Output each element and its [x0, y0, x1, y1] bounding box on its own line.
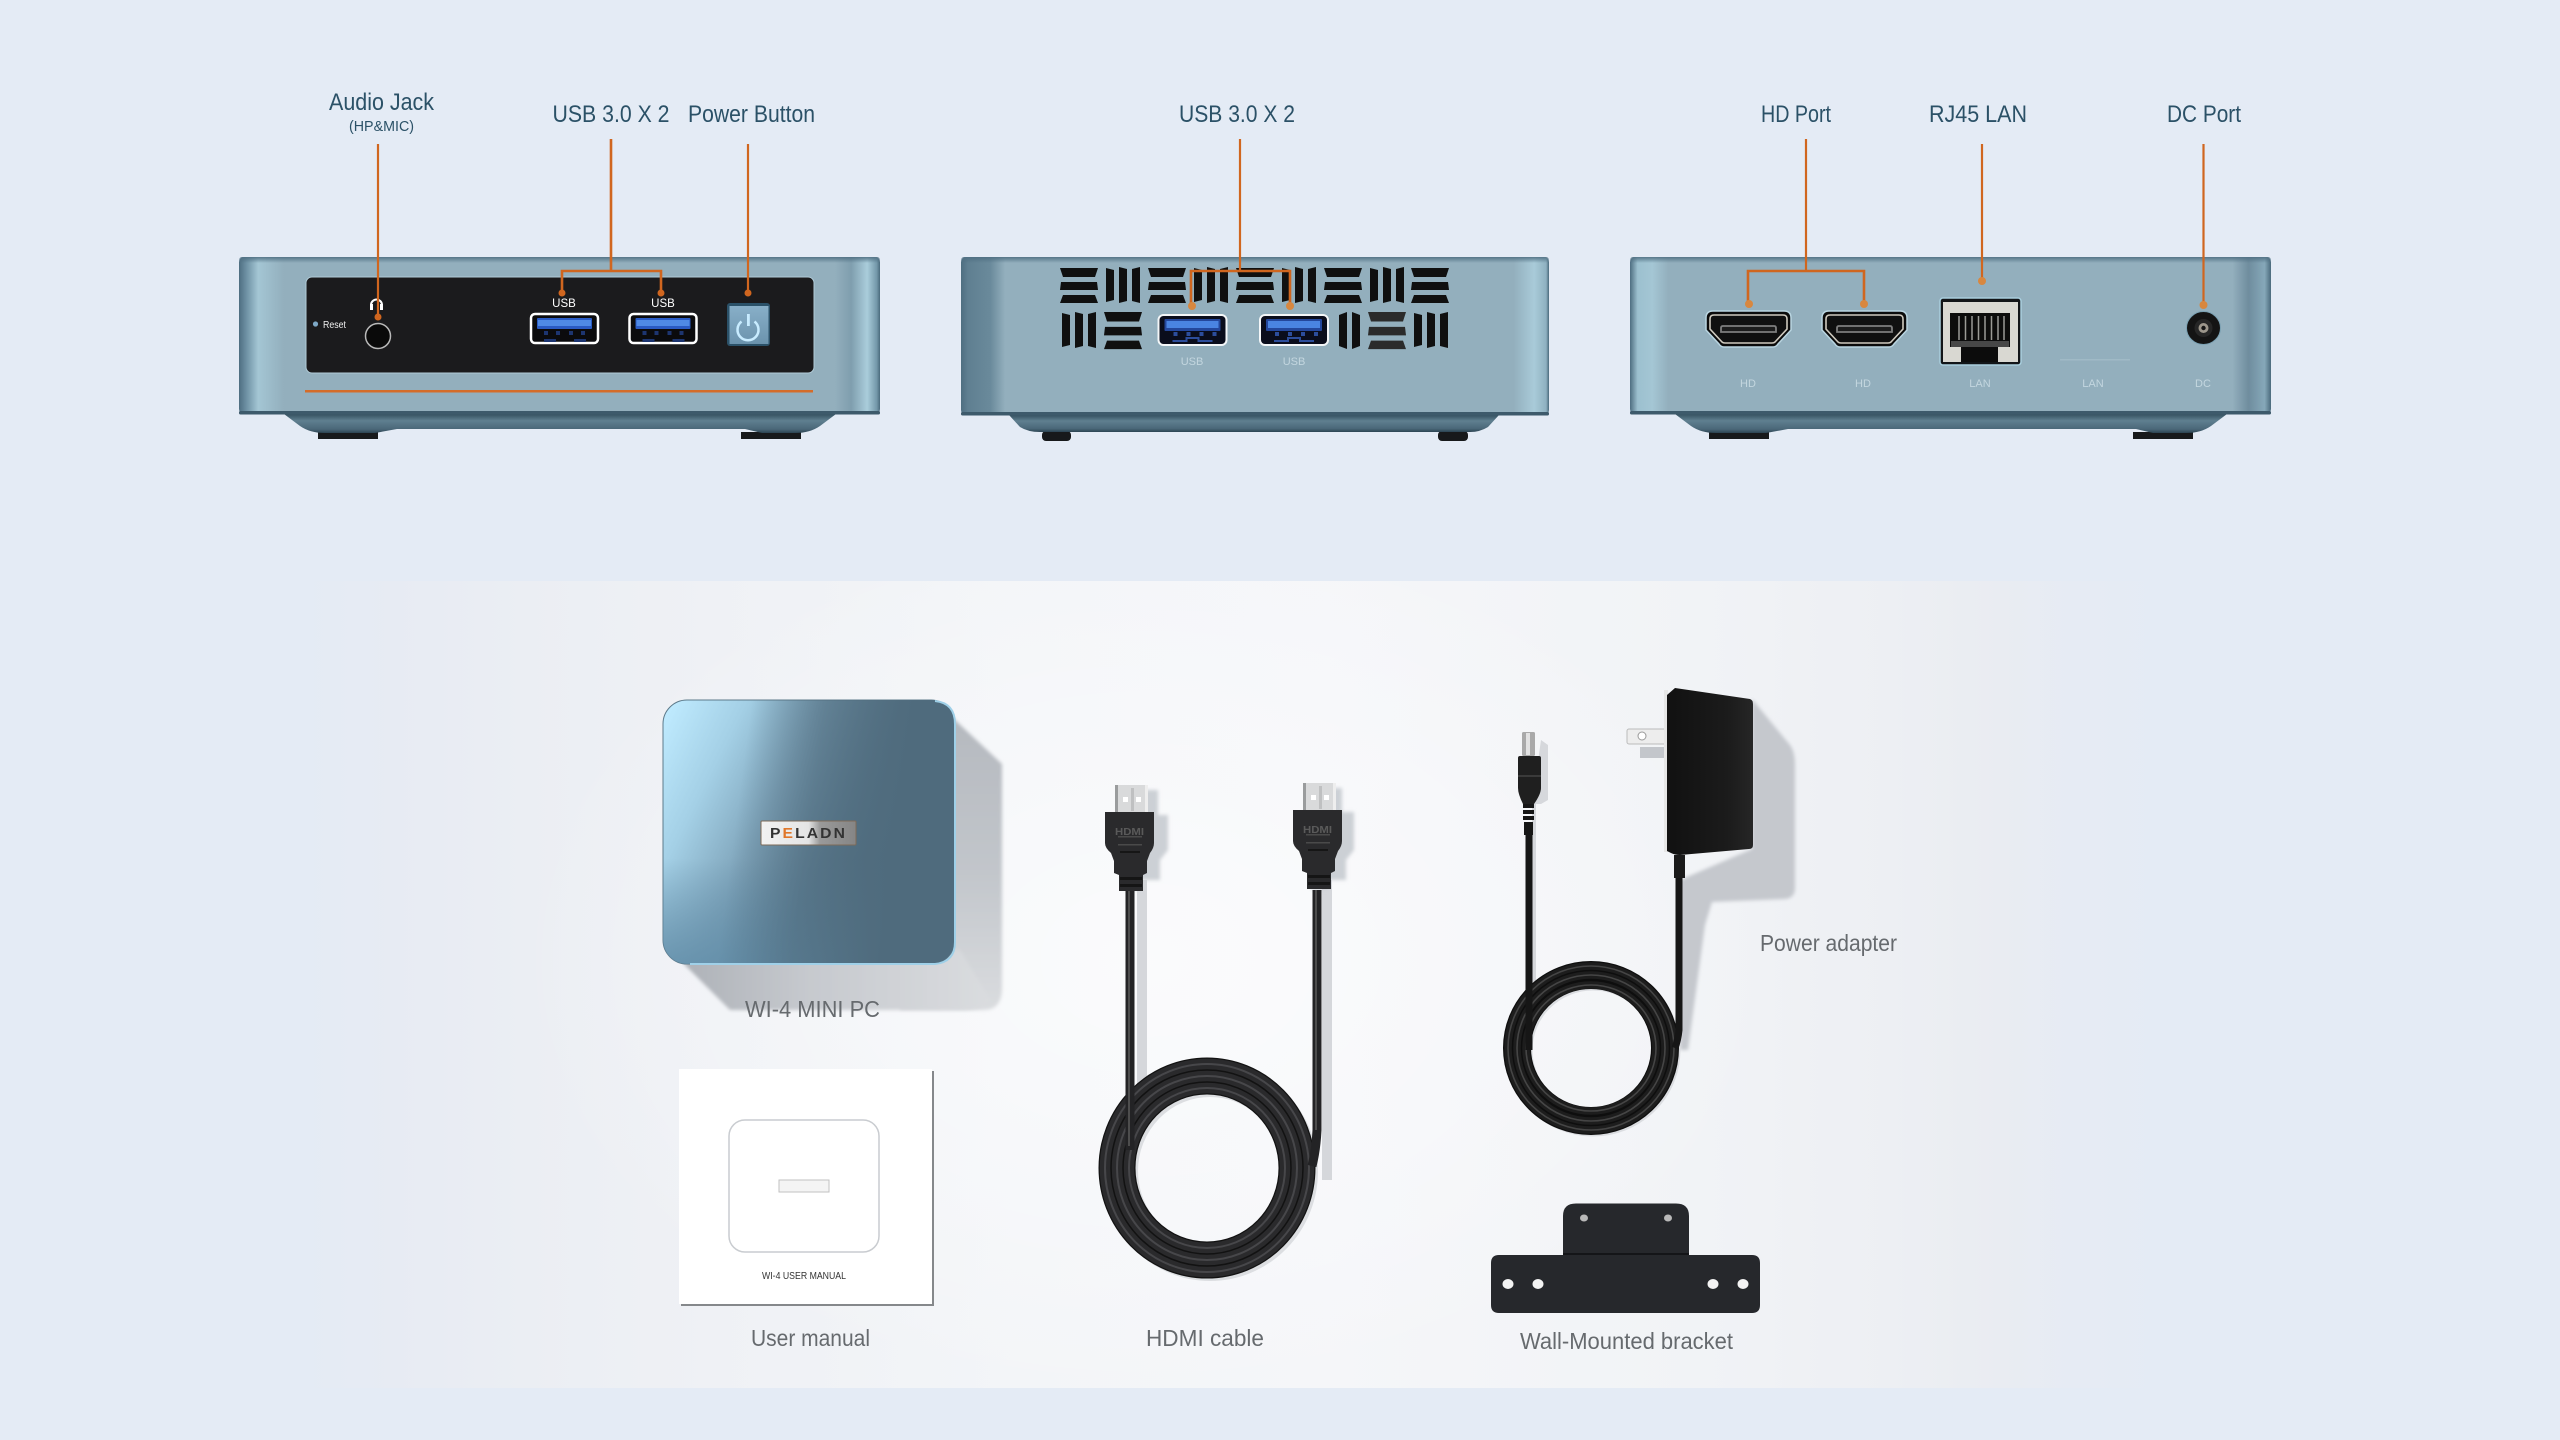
label: Audio Jack: Audio Jack	[329, 89, 435, 116]
black port panel	[306, 277, 814, 373]
rear USB port left	[1158, 315, 1226, 345]
port captions: HD	[1855, 378, 1871, 390]
reset pinhole and text: Reset	[323, 319, 346, 331]
label: RJ45 LAN: RJ45 LAN	[1929, 101, 2027, 128]
blanked LAN mark	[2060, 359, 2130, 360]
manual title: WI-4 USER MANUAL	[762, 1270, 846, 1282]
USB labels: USB	[552, 298, 576, 310]
panel: package contents backdrop	[300, 581, 2170, 1388]
prong	[1627, 729, 1667, 744]
item: mini PC top view	[663, 700, 1002, 1010]
label: HD Port: HD Port	[1761, 101, 1831, 128]
item: HDMI cable	[1105, 783, 1354, 1272]
left connector	[1105, 785, 1154, 891]
cast shadow right	[900, 706, 1002, 1010]
cable runs	[1129, 890, 1317, 1166]
body	[961, 257, 1549, 415]
left connector: HDMI	[1115, 827, 1144, 838]
label: HDMI cable: HDMI cable	[1146, 1325, 1264, 1351]
port captions	[1740, 378, 2211, 390]
PELADN badge	[761, 821, 856, 845]
power button	[727, 303, 770, 346]
device lid	[663, 700, 955, 964]
label: HP and MIC: (HP&MIC)	[349, 118, 414, 135]
panel: back ports device	[1630, 257, 2271, 439]
feet	[318, 432, 801, 439]
reset pinhole and text	[313, 319, 346, 331]
label: User manual: User manual	[751, 1325, 870, 1351]
label: WI-4 MINI PC: WI-4 MINI PC	[745, 996, 880, 1022]
vents bottom row	[1062, 312, 1448, 349]
callout lines: front view	[374, 139, 752, 320]
panel: front view device	[239, 257, 880, 439]
vents top row	[1060, 267, 1449, 303]
adapter body	[1667, 688, 1753, 855]
USB labels	[552, 298, 675, 310]
item: user manual	[679, 1069, 934, 1306]
item: wall-mounted bracket	[1491, 1204, 1760, 1313]
right connector: HDMI	[1303, 825, 1332, 836]
body	[1630, 257, 2271, 414]
body	[239, 257, 880, 414]
rear USB labels: USB	[1181, 356, 1203, 368]
base	[1675, 414, 2227, 433]
wall plate edge	[1664, 690, 1668, 852]
label: Power Button: Power Button	[688, 101, 815, 128]
label: DC Port: DC Port	[2167, 101, 2241, 128]
port captions: LAN	[2082, 378, 2104, 390]
rear USB port right	[1260, 315, 1328, 345]
cable runs	[1529, 835, 1679, 1050]
bracket plate	[1491, 1204, 1760, 1313]
coil shadow	[1519, 977, 1667, 1123]
HDMI port right	[1822, 311, 1907, 347]
USB port left	[531, 314, 598, 343]
DC plug	[1518, 732, 1541, 835]
port captions: LAN	[1969, 378, 1991, 390]
USB labels: USB	[651, 298, 675, 310]
orange accent line	[305, 390, 813, 392]
PELADN badge: PELADN	[770, 825, 847, 842]
base	[1009, 415, 1499, 432]
cast shadow bottom	[684, 950, 990, 1010]
label: USB 3.0 X 2 rear: USB 3.0 X 2	[1179, 101, 1295, 128]
port captions: HD	[1740, 378, 1756, 390]
feet	[1042, 431, 1468, 441]
RJ45 LAN port	[1940, 298, 2021, 365]
connector shadows	[1125, 788, 1354, 890]
coil	[1508, 966, 1674, 1130]
cable shadow	[1120, 880, 1327, 1263]
manual page	[681, 1071, 934, 1306]
panel: rear vent view device	[961, 257, 1549, 441]
bracket holes	[1502, 1279, 1748, 1289]
base	[284, 414, 836, 433]
manual line drawing	[729, 1120, 879, 1252]
label: Wall-Mounted bracket: Wall-Mounted bracket	[1520, 1328, 1734, 1354]
HDMI port left	[1706, 311, 1791, 347]
coil	[1105, 1064, 1309, 1272]
USB port right	[630, 314, 696, 343]
rear USB labels	[1181, 356, 1305, 368]
adapter shadow	[1680, 699, 1795, 1050]
strain relief	[1674, 855, 1685, 878]
callout lines: back ports view	[1745, 139, 2208, 309]
feet	[1709, 432, 2193, 439]
label: USB 3.0 X 2 front: USB 3.0 X 2	[552, 101, 670, 128]
audio jack	[366, 300, 390, 348]
label: Power adapter: Power adapter	[1760, 930, 1897, 956]
DC port	[2186, 312, 2220, 344]
port captions: DC	[2195, 378, 2211, 390]
rear USB labels: USB	[1283, 356, 1305, 368]
right connector	[1293, 783, 1342, 889]
callout lines: rear view	[1188, 139, 1294, 310]
item: power adapter	[1508, 688, 1795, 1130]
